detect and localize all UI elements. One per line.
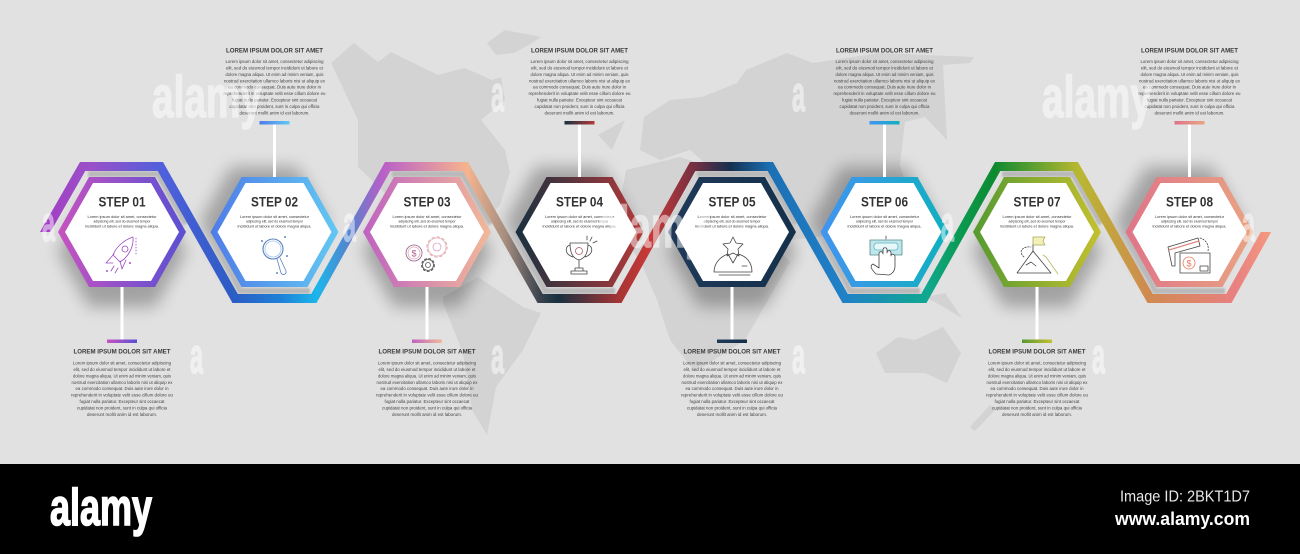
hexagon 04 bbox=[516, 177, 644, 287]
callout body 01: cupidatat non proident, sunt in culpa qui officia bbox=[77, 405, 167, 410]
callout body 01: deserunt mollit anim id est laborum. bbox=[87, 412, 157, 417]
callout body 04: ea commodo consequat. Duis aute irure dolor in bbox=[533, 85, 626, 90]
callout body 03: dolore magna aliqua. Ut enim ad minim veniam, quis bbox=[378, 373, 477, 378]
hexagon text 08: Lorem ipsum dolor sit amet, consectetur bbox=[1155, 214, 1225, 219]
hexagon text 02: incididunt ut labore et dolore magna aliqua. bbox=[238, 223, 312, 228]
icon: magnifier bbox=[261, 236, 288, 274]
icon: hand on card bbox=[870, 236, 902, 275]
hexagon 01 bbox=[58, 177, 186, 287]
callout body 04: deserunt mollit anim id est laborum. bbox=[544, 110, 614, 115]
callout body 04: nostrud exercitation ullamco laboris nisi ut aliquip ex bbox=[529, 78, 631, 83]
icon: cards and money: $ bbox=[1186, 258, 1192, 268]
callout body 02: Lorem ipsum dolor sit amet, consectetur adipiscing bbox=[226, 59, 324, 64]
callout body 06: nostrud exercitation ullamco laboris nisi ut aliquip ex bbox=[834, 78, 936, 83]
world map bbox=[331, 30, 996, 435]
callout body 02: dolore magna aliqua. Ut enim ad minim veniam, quis bbox=[226, 72, 324, 77]
callout title 05: LOREM IPSUM DOLOR SIT AMET bbox=[684, 348, 781, 356]
callout body 02: cupidatat non proident, sunt in culpa qui officia bbox=[230, 104, 320, 109]
hexagon text 07: Lorem ipsum dolor sit amet, consectetur bbox=[1002, 214, 1072, 219]
callout body 08: Lorem ipsum dolor sit amet, consectetur adipiscing bbox=[1140, 59, 1239, 64]
hexagon text 08: incididunt ut labore et dolore magna aliqua. bbox=[1152, 223, 1226, 228]
callout body 01: reprehenderit in voluptate velit esse cillum dolore eu bbox=[71, 393, 173, 398]
hexagon text 04: Lorem ipsum dolor sit amet, consectetur bbox=[545, 214, 615, 219]
callout body 05: fugiat nulla pariatur. Excepteur sint occaecat bbox=[690, 399, 775, 404]
soft hexagon shadows bbox=[58, 167, 1243, 307]
hexagon 06 bbox=[820, 177, 948, 287]
heading: step 04: STEP 04 bbox=[556, 194, 603, 210]
callout: step 01 bbox=[71, 340, 173, 417]
callout body 01: dolore magna aliqua. Ut enim ad minim veniam, quis bbox=[73, 373, 172, 378]
watermarks: a bbox=[491, 328, 505, 384]
callout body 03: elit, sed do eiusmod tempor incididunt ut labore et bbox=[378, 367, 476, 372]
hexagon text 01 bbox=[85, 214, 159, 228]
watermarks: alamy bbox=[597, 195, 707, 260]
callout body 06: elit, sed do eiusmod tempor incididunt ut labore et bbox=[836, 66, 934, 70]
callout body 03: deserunt mollit anim id est laborum. bbox=[392, 412, 462, 417]
accent bar 05 bbox=[717, 340, 747, 343]
callout body 05 bbox=[681, 360, 783, 417]
icon: gears and coin: $ bbox=[411, 248, 417, 258]
callout body 05: cupidatat non proident, sunt in culpa qui officia bbox=[687, 405, 777, 410]
step 05 bbox=[668, 177, 796, 287]
callout body 07: dolore magna aliqua. Ut enim ad minim veniam, quis bbox=[988, 373, 1087, 378]
callout body 01 bbox=[71, 360, 173, 417]
callout body 02: nostrud exercitation ullamco laboris nisi ut aliquip ex bbox=[224, 78, 326, 83]
callout body 01: nostrud exercitation ullamco laboris nisi ut aliquip ex bbox=[72, 380, 173, 385]
callout body 04: elit, sed do eiusmod tempor incididunt ut labore et bbox=[531, 66, 629, 70]
callout body 07: cupidatat non proident, sunt in culpa qui officia bbox=[992, 405, 1082, 410]
hexagon text 01: Lorem ipsum dolor sit amet, consectetur bbox=[88, 214, 157, 219]
icon: trophy bbox=[566, 236, 597, 274]
watermarks: a bbox=[42, 196, 56, 252]
accent bar 08 bbox=[1174, 121, 1204, 124]
callout body 06: dolore magna aliqua. Ut enim ad minim veniam, quis bbox=[836, 72, 934, 77]
hexagon text 03: adipiscing elit, sed do eiusmod tempor bbox=[398, 219, 456, 224]
hexagon text 04: incididunt ut labore et dolore magna aliqua. bbox=[542, 223, 616, 228]
accent bar 04 bbox=[564, 121, 594, 124]
watermarks: a bbox=[792, 66, 806, 122]
website: www.alamy.com bbox=[1114, 509, 1250, 529]
hexagon 05 bbox=[668, 177, 796, 287]
callout body 01: Lorem ipsum dolor sit amet, consectetur adipiscing bbox=[73, 360, 171, 366]
hexagon text 05: adipiscing elit, sed do eiusmod tempor bbox=[704, 219, 761, 224]
hexagon text 05: incididunt ut labore et dolore magna aliqua. bbox=[695, 223, 769, 228]
hexagon 02 bbox=[210, 177, 338, 287]
callout body 02: elit, sed do eiusmod tempor incididunt ut labore et bbox=[226, 66, 324, 70]
callout body 03: ea commodo consequat. Duis aute irure dolor in bbox=[380, 386, 474, 391]
callout: step 06 bbox=[834, 48, 936, 124]
callout body 06: deserunt mollit anim id est laborum. bbox=[850, 110, 920, 115]
callout body 07: reprehenderit in voluptate velit esse cillum dolore eu bbox=[986, 393, 1088, 398]
watermarks: a bbox=[491, 66, 505, 122]
step 02 bbox=[210, 177, 338, 287]
callout body 04 bbox=[528, 59, 631, 115]
step 06 bbox=[820, 177, 948, 287]
hexagon text 06 bbox=[848, 214, 922, 228]
hexagon text 06: adipiscing elit, sed do eiusmod tempor bbox=[856, 219, 914, 224]
callout body 08 bbox=[1138, 59, 1241, 115]
callout body 06 bbox=[834, 59, 936, 115]
callout title 03: LOREM IPSUM DOLOR SIT AMET bbox=[378, 348, 476, 356]
callout body 08: elit, sed do eiusmod tempor incididunt ut labore et bbox=[1141, 66, 1239, 70]
hexagon text 02: adipiscing elit, sed do eiusmod tempor bbox=[246, 219, 304, 224]
grey bands between ribbon and hexagons bbox=[88, 174, 1225, 291]
accent bar 06 bbox=[870, 121, 900, 124]
callout title 08: LOREM IPSUM DOLOR SIT AMET bbox=[1141, 48, 1238, 54]
callout body 06: Lorem ipsum dolor sit amet, consectetur adipiscing bbox=[836, 59, 934, 64]
callout body 08: cupidatat non proident, sunt in culpa qui officia bbox=[1144, 104, 1235, 109]
callout body 07 bbox=[986, 360, 1088, 417]
hexagon text 02 bbox=[238, 214, 312, 228]
heading: step 03: STEP 03 bbox=[404, 194, 451, 210]
hexagon text 03: incididunt ut labore et dolore magna aliqua. bbox=[390, 223, 464, 228]
hexagon text 03 bbox=[390, 214, 464, 228]
callout: step 08 bbox=[1138, 48, 1241, 124]
step 04 bbox=[516, 177, 644, 287]
callout title 04: LOREM IPSUM DOLOR SIT AMET bbox=[531, 48, 628, 54]
callout title 07: LOREM IPSUM DOLOR SIT AMET bbox=[988, 348, 1086, 356]
hexagon text 06: Lorem ipsum dolor sit amet, consectetur bbox=[850, 214, 920, 219]
callout body 03 bbox=[376, 360, 478, 417]
watermarks: a bbox=[190, 328, 204, 384]
watermarks: a bbox=[343, 196, 357, 252]
callout body 01: ea commodo consequat. Duis aute irure dolor in bbox=[76, 386, 169, 391]
hexagon text 05 bbox=[695, 214, 769, 228]
callout body 04: cupidatat non proident, sunt in culpa qui officia bbox=[534, 104, 625, 109]
heading: step 01: STEP 01 bbox=[98, 194, 146, 210]
hexagon text 05: Lorem ipsum dolor sit amet, consectetur bbox=[698, 214, 767, 219]
callout body 07: Lorem ipsum dolor sit amet, consectetur adipiscing bbox=[988, 360, 1086, 366]
callout: step 04 bbox=[528, 48, 631, 124]
accent bar 07 bbox=[1022, 340, 1052, 343]
callout body 06: ea commodo consequat. Duis aute irure dolor in bbox=[838, 85, 931, 90]
callout body 04: fugiat nulla pariatur. Excepteur sint occaecat bbox=[537, 98, 623, 102]
step 08 bbox=[1126, 177, 1254, 287]
callout: step 07 bbox=[986, 340, 1088, 417]
callout body 08: nostrud exercitation ullamco laboris nisi ut aliquip ex bbox=[1139, 78, 1241, 83]
hexagon text 07: incididunt ut labore et dolore magna aliqua. bbox=[1000, 223, 1074, 228]
callout body 02: fugiat nulla pariatur. Excepteur sint occaecat bbox=[232, 98, 318, 102]
hexagon text 07: adipiscing elit, sed do eiusmod tempor bbox=[1008, 219, 1066, 224]
callout body 07: ea commodo consequat. Duis aute irure dolor in bbox=[990, 386, 1084, 391]
watermarks: alamy bbox=[1042, 65, 1152, 130]
callout body 02 bbox=[224, 59, 326, 115]
callout body 07: nostrud exercitation ullamco laboris nisi ut aliquip ex bbox=[986, 380, 1088, 385]
callout body 06: reprehenderit in voluptate velit esse cillum dolore eu bbox=[834, 91, 936, 96]
hexagon text 08: adipiscing elit, sed do eiusmod tempor bbox=[1161, 219, 1219, 224]
accent bar 02 bbox=[260, 121, 290, 124]
callout title 02: LOREM IPSUM DOLOR SIT AMET bbox=[226, 48, 323, 54]
callout body 05: elit, sed do eiusmod tempor incididunt ut labore et bbox=[684, 367, 781, 372]
callout body 05: nostrud exercitation ullamco laboris nisi ut aliquip ex bbox=[682, 380, 783, 385]
watermarks: a bbox=[941, 196, 955, 252]
callout body 06: fugiat nulla pariatur. Excepteur sint occaecat bbox=[842, 98, 928, 102]
callout body 06: cupidatat non proident, sunt in culpa qui officia bbox=[840, 104, 930, 109]
callout body 02: deserunt mollit anim id est laborum. bbox=[240, 110, 310, 115]
watermarks: alamy bbox=[152, 65, 262, 130]
callout body 03: reprehenderit in voluptate velit esse cillum dolore eu bbox=[376, 393, 478, 398]
heading: step 05: STEP 05 bbox=[708, 194, 756, 210]
icon: mountain flag bbox=[1017, 237, 1058, 274]
accent bar 03 bbox=[412, 340, 442, 343]
callout body 07: deserunt mollit anim id est laborum. bbox=[1002, 412, 1072, 417]
callout body 08: fugiat nulla pariatur. Excepteur sint occaecat bbox=[1147, 98, 1233, 102]
callout body 04: reprehenderit in voluptate velit esse cillum dolore eu bbox=[528, 91, 631, 96]
callout body 08: dolore magna aliqua. Ut enim ad minim veniam, quis bbox=[1140, 72, 1239, 77]
callout body 03: nostrud exercitation ullamco laboris nisi ut aliquip ex bbox=[376, 380, 478, 385]
callout body 08: reprehenderit in voluptate velit esse cillum dolore eu bbox=[1138, 91, 1241, 96]
callout body 05: reprehenderit in voluptate velit esse cillum dolore eu bbox=[681, 393, 783, 398]
callout body 02: reprehenderit in voluptate velit esse cillum dolore eu bbox=[224, 91, 326, 96]
footer logo: alamy bbox=[50, 479, 152, 537]
callout body 04: dolore magna aliqua. Ut enim ad minim veniam, quis bbox=[530, 72, 629, 77]
callout title 06: LOREM IPSUM DOLOR SIT AMET bbox=[836, 48, 933, 54]
step 01 bbox=[58, 177, 186, 287]
callout: step 05 bbox=[681, 340, 783, 417]
hexagon text 03: Lorem ipsum dolor sit amet, consectetur bbox=[392, 214, 462, 219]
icon: rocket bbox=[106, 237, 136, 273]
step 07 bbox=[973, 177, 1101, 287]
hexagon text 07 bbox=[1000, 214, 1074, 228]
hexagon 03 bbox=[363, 177, 491, 287]
callout body 05: ea commodo consequat. Duis aute irure dolor in bbox=[686, 386, 779, 391]
hexagon text 01: incididunt ut labore et dolore magna aliqua. bbox=[85, 223, 159, 228]
connector lines bbox=[120, 124, 1191, 340]
image id: Image ID: 2BKT1D7 bbox=[1120, 488, 1250, 506]
hexagon text 04 bbox=[542, 214, 616, 228]
heading: step 06: STEP 06 bbox=[861, 194, 908, 210]
callout body 01: elit, sed do eiusmod tempor incididunt ut labore et bbox=[74, 367, 171, 372]
watermarks: a bbox=[792, 328, 806, 384]
callout body 03: Lorem ipsum dolor sit amet, consectetur adipiscing bbox=[378, 360, 476, 366]
hexagon text 04: adipiscing elit, sed do eiusmod tempor bbox=[551, 219, 609, 224]
callout body 07: elit, sed do eiusmod tempor incididunt ut labore et bbox=[988, 367, 1086, 372]
callout body 03: fugiat nulla pariatur. Excepteur sint occaecat bbox=[384, 399, 470, 404]
footer bar bbox=[0, 464, 1300, 554]
callout body 07: fugiat nulla pariatur. Excepteur sint occaecat bbox=[994, 399, 1080, 404]
callout body 05: deserunt mollit anim id est laborum. bbox=[697, 412, 767, 417]
hexagon text 08 bbox=[1152, 214, 1226, 228]
callout body 05: dolore magna aliqua. Ut enim ad minim veniam, quis bbox=[683, 373, 782, 378]
callout: step 03 bbox=[376, 340, 478, 417]
callout body 08: deserunt mollit anim id est laborum. bbox=[1154, 110, 1224, 115]
hexagon 08 bbox=[1126, 177, 1254, 287]
callout body 05: Lorem ipsum dolor sit amet, consectetur adipiscing bbox=[683, 360, 781, 366]
accent bar 01 bbox=[107, 340, 137, 343]
watermarks bbox=[42, 65, 1256, 384]
callout body 08: ea commodo consequat. Duis aute irure dolor in bbox=[1143, 85, 1236, 90]
text: a bbox=[1242, 196, 1256, 252]
icon: star achiever bbox=[714, 237, 752, 275]
callout: step 02 bbox=[224, 48, 326, 124]
callout title 01: LOREM IPSUM DOLOR SIT AMET bbox=[74, 348, 171, 356]
callout body 03: cupidatat non proident, sunt in culpa qui officia bbox=[382, 405, 472, 410]
watermarks: a bbox=[1092, 328, 1106, 384]
heading: step 07: STEP 07 bbox=[1014, 194, 1060, 210]
heading: step 08: STEP 08 bbox=[1166, 194, 1213, 210]
callout body 01: fugiat nulla pariatur. Excepteur sint occaecat bbox=[80, 399, 165, 404]
heading: step 02: STEP 02 bbox=[251, 194, 298, 210]
hexagon text 06: incididunt ut labore et dolore magna aliqua. bbox=[848, 223, 922, 228]
hexagon text 01: adipiscing elit, sed do eiusmod tempor bbox=[94, 219, 151, 224]
hexagon 07 bbox=[973, 177, 1101, 287]
gradient ribbon bbox=[40, 162, 1271, 303]
hexagon text 02: Lorem ipsum dolor sit amet, consectetur bbox=[240, 214, 310, 219]
callout body 04: Lorem ipsum dolor sit amet, consectetur adipiscing bbox=[530, 59, 629, 64]
step 03 bbox=[363, 177, 491, 287]
callout body 02: ea commodo consequat. Duis aute irure dolor in bbox=[228, 85, 321, 90]
